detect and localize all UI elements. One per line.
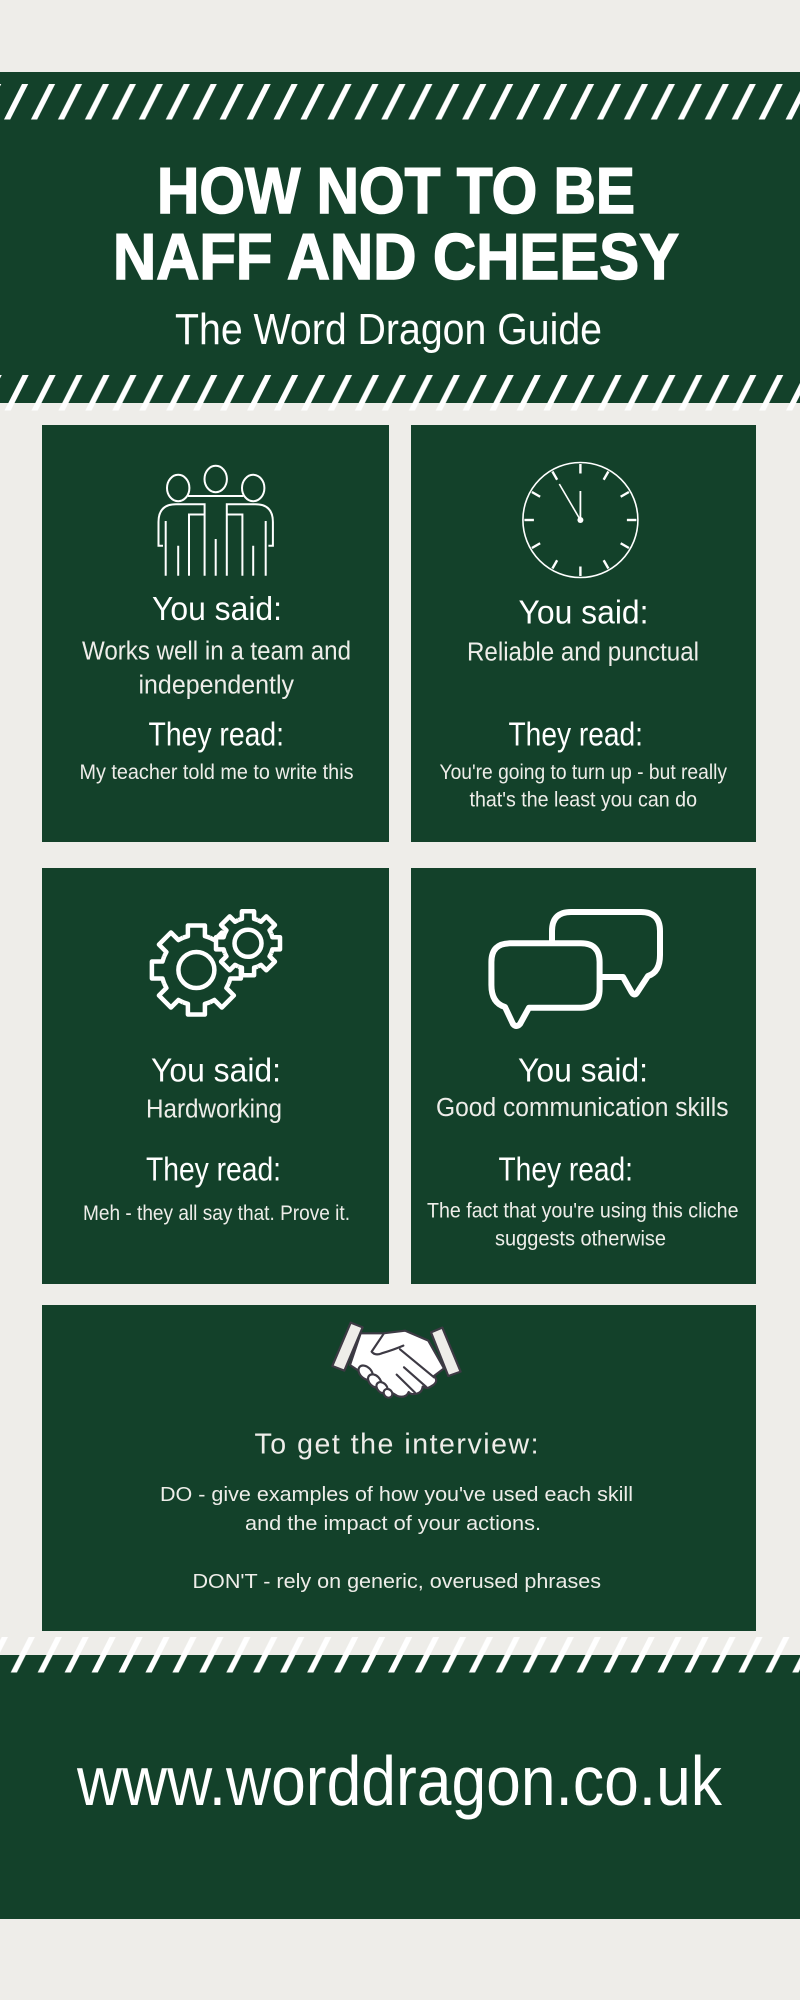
text: what you said: Reliable and punctual <box>467 638 699 666</box>
text: website url: www.worddragon.co.uk <box>76 1742 723 1820</box>
text: don't advice: DON'T - rely on generic, overused phrases <box>192 1570 601 1593</box>
text: what they read <box>440 760 727 812</box>
icon: three people <box>158 466 273 576</box>
heading: you said: You said: <box>518 1052 648 1089</box>
panel: teamwork card <box>42 425 389 842</box>
text: what they read <box>427 1199 738 1251</box>
title: NAFF AND CHEESY <box>113 220 679 293</box>
heading: you said: You said: <box>152 590 282 627</box>
panel: hardworking card <box>42 868 389 1284</box>
heading: to get the interview: To get the interview: <box>254 1428 538 1460</box>
title: HOW NOT TO BE <box>157 154 635 227</box>
subtitle: The Word Dragon Guide <box>175 305 602 354</box>
panel: reliability card <box>411 425 756 842</box>
heading: they read: They read: <box>508 716 643 753</box>
text: what they read: suggests otherwise <box>495 1227 666 1251</box>
heading: you said: You said: <box>518 593 648 630</box>
panel: footer banner <box>0 1637 800 1919</box>
text: what they read: that's the least you can do <box>470 788 697 812</box>
icon: speech bubbles <box>491 912 660 1026</box>
text: what they read: Meh - they all say that. Prove it. <box>83 1201 350 1225</box>
text: what they read: You're going to turn up - but really <box>440 760 727 784</box>
panel: header banner <box>0 72 800 411</box>
title <box>113 154 679 293</box>
text: do advice: DO - give examples of how you've used each skill <box>160 1483 633 1506</box>
heading: they read: They read: <box>148 716 284 753</box>
text: do advice <box>160 1483 633 1535</box>
icon: handshake <box>332 1323 461 1399</box>
text: what they read: The fact that you're using this cliche <box>427 1199 738 1223</box>
text: do advice: and the impact of your actions. <box>245 1512 541 1535</box>
icon: clock <box>523 462 638 578</box>
icon: gears <box>152 911 280 1014</box>
text: what you said: independently <box>138 671 294 699</box>
text: what you said: Works well in a team and <box>82 637 351 665</box>
text: what you said <box>82 637 351 699</box>
text: what you said: Hardworking <box>146 1095 282 1123</box>
heading: they read: They read: <box>146 1151 281 1188</box>
panel: interview advice <box>42 1305 756 1631</box>
heading: they read: They read: <box>498 1151 633 1188</box>
text: what they read: My teacher told me to write this <box>80 760 354 784</box>
heading: you said: You said: <box>151 1052 281 1089</box>
text: what you said: Good communication skills <box>436 1094 728 1122</box>
panel: communication card <box>411 868 756 1284</box>
